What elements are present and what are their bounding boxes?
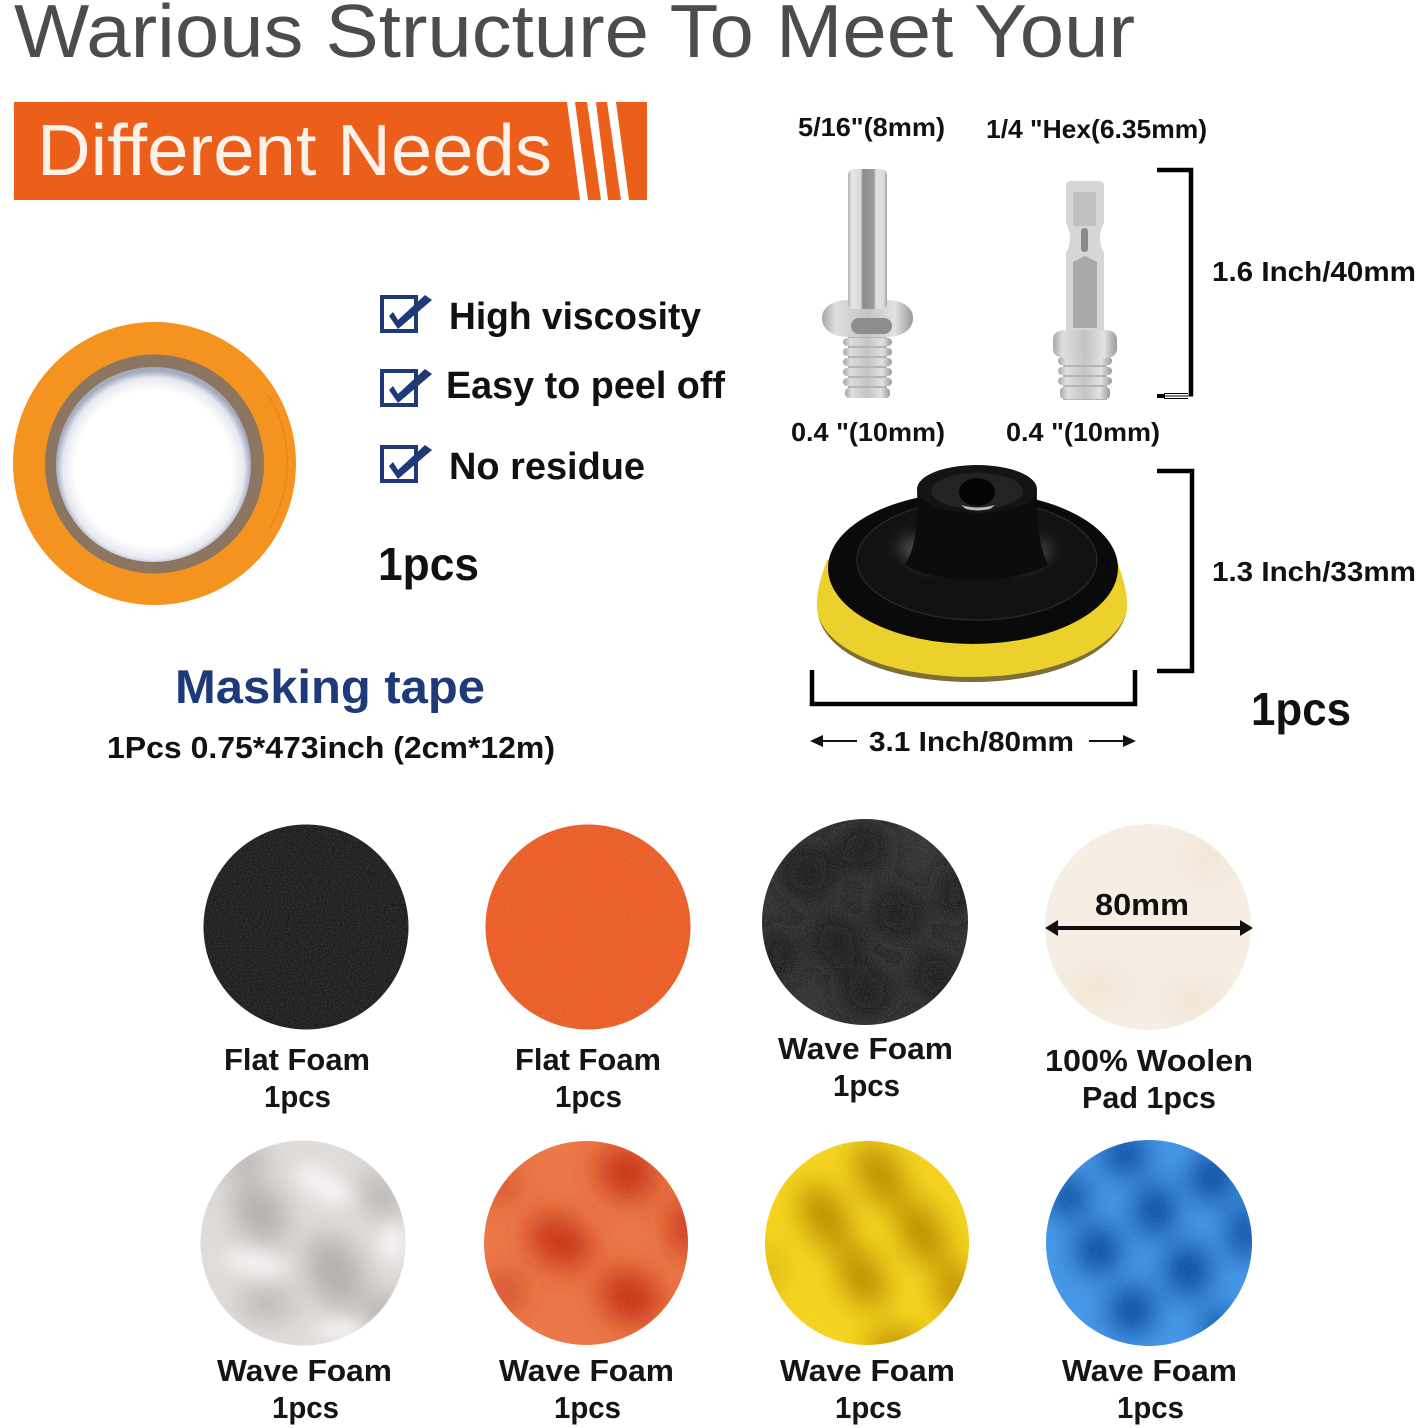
- dimension arrow: 80mm: [1045, 920, 1253, 936]
- feature: high viscosity: High viscosity: [449, 296, 701, 338]
- tape quantity: 1pcs: [378, 538, 479, 590]
- label: yellow wave foam: 1pcs: [835, 1390, 902, 1425]
- label: woolen pad: [1045, 1043, 1253, 1115]
- label: black wave foam: 1pcs: [833, 1068, 900, 1103]
- pad: yellow wave foam: [765, 1141, 969, 1345]
- label: blue wave foam: Wave Foam: [1062, 1353, 1237, 1388]
- thread label left: 0.4 "(10mm): [791, 417, 945, 447]
- label: orange flat foam: Flat Foam: [515, 1042, 661, 1077]
- icon: check 2: [382, 369, 432, 405]
- feature: no residue: No residue: [449, 446, 645, 488]
- pad: orange flat foam: [485, 824, 691, 1030]
- label: orange wave foam: Wave Foam: [499, 1353, 674, 1388]
- label: orange wave foam: 1pcs: [554, 1390, 621, 1425]
- feature: easy to peel off: Easy to peel off: [446, 365, 725, 407]
- pad: woolen: [1045, 824, 1253, 1030]
- dimension label: shank height: 1.6 Inch/40mm: [1212, 256, 1416, 287]
- dimension label: pad height: 1.3 Inch/33mm: [1212, 556, 1416, 587]
- label: orange flat foam: 1pcs: [555, 1079, 622, 1114]
- label: woolen pad: 100% Woolen: [1045, 1043, 1253, 1078]
- label: white wave foam: [217, 1353, 392, 1425]
- pad: blue wave foam: [1046, 1135, 1261, 1346]
- shank label right: 1/4 "Hex(6.35mm): [986, 114, 1207, 144]
- pad: black wave foam: [760, 811, 975, 1030]
- dimension label: pad width: 3.1 Inch/80mm: [869, 726, 1074, 757]
- masking tape size: 1Pcs 0.75*473inch (2cm*12m): [107, 730, 555, 765]
- dimension label: 80mm: 80mm: [1095, 887, 1189, 922]
- label: black wave foam: Wave Foam: [778, 1031, 953, 1066]
- label: orange wave foam: [499, 1353, 674, 1425]
- icon: backing pad: [817, 465, 1127, 682]
- label: white wave foam: Wave Foam: [217, 1353, 392, 1388]
- pad: orange wave foam: [482, 1135, 702, 1345]
- dimension bracket: pad width: [812, 670, 1135, 704]
- label: black wave foam: [778, 1031, 953, 1103]
- label: black flat foam: 1pcs: [264, 1079, 331, 1114]
- masking tape heading: Masking tape: [175, 660, 485, 713]
- label: yellow wave foam: [780, 1353, 955, 1425]
- icon: masking tape roll: [13, 322, 296, 605]
- dimension bracket: pad height: [1157, 471, 1192, 671]
- dimension label: pad width: [810, 726, 1136, 757]
- label: white wave foam: 1pcs: [272, 1390, 339, 1425]
- label: black flat foam: Flat Foam: [224, 1042, 370, 1077]
- dimension bracket: shank height: [1157, 170, 1193, 398]
- pad quantity: 1pcs: [1251, 683, 1351, 735]
- icon: round shank drill adapter: [822, 169, 913, 398]
- banner text: Different Needs: [37, 111, 552, 191]
- label: yellow wave foam: Wave Foam: [780, 1353, 955, 1388]
- label: blue wave foam: 1pcs: [1117, 1390, 1184, 1425]
- heading banner: [14, 102, 647, 200]
- label: black flat foam: [224, 1042, 370, 1114]
- pad: white wave foam: [200, 1140, 409, 1346]
- icon: check 3: [382, 445, 432, 481]
- pad: black flat foam: [203, 824, 409, 1030]
- shank label left: 5/16"(8mm): [798, 112, 945, 142]
- label: blue wave foam: [1062, 1353, 1237, 1425]
- icon: check 1: [382, 295, 432, 331]
- icon: hex shank drill adapter: [1053, 181, 1117, 400]
- thread label right: 0.4 "(10mm): [1006, 417, 1160, 447]
- label: orange flat foam: [515, 1042, 661, 1114]
- label: woolen pad: Pad 1pcs: [1082, 1080, 1216, 1115]
- feature list: [382, 295, 725, 488]
